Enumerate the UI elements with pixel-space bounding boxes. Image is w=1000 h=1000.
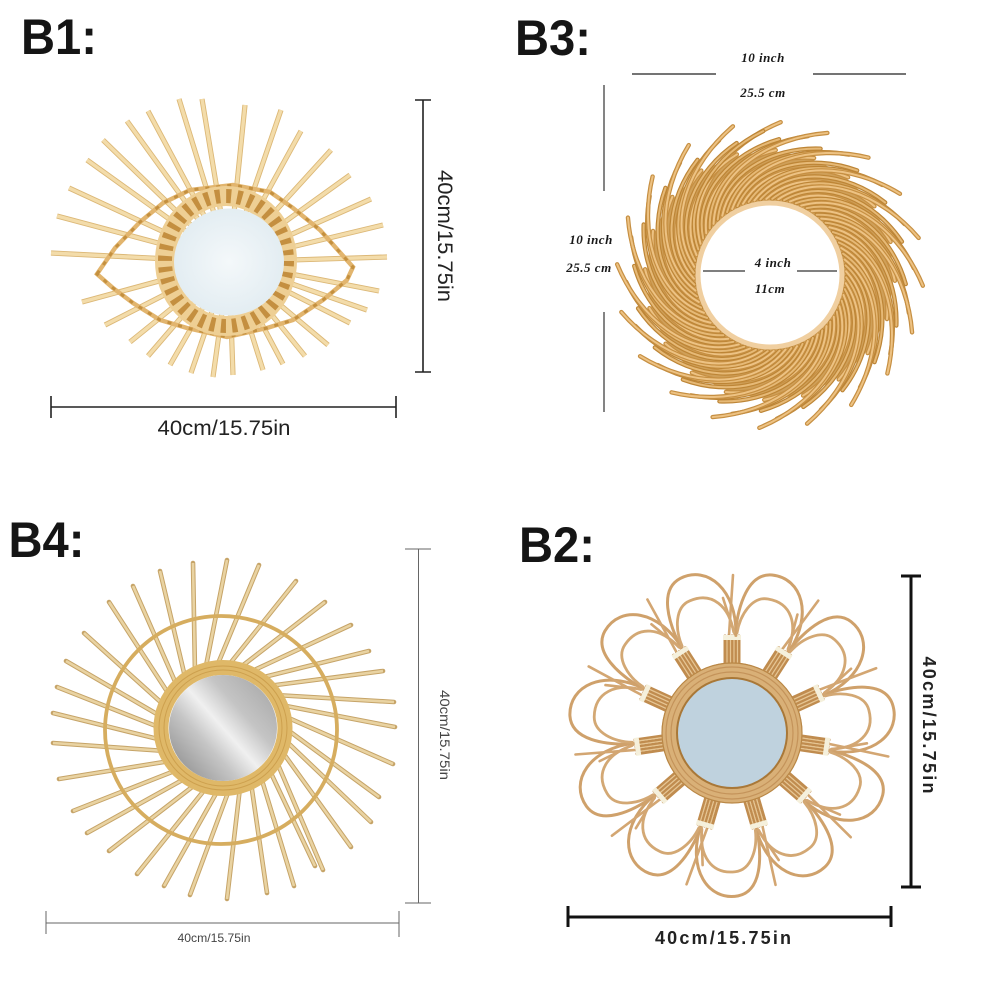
dimension: height: 40cm/15.75in [437, 690, 453, 780]
dimension: mirror diameter [703, 255, 837, 296]
heading: B3: B3: [515, 10, 591, 66]
icon: eye rattan mirror [51, 99, 387, 377]
heading: B2: B2: [519, 517, 595, 573]
dimension: mirror diameter: 4 inch [754, 255, 791, 270]
dimension: overall height [565, 85, 613, 412]
dimension: height: 40cm/15.75in [433, 170, 456, 302]
dimension: overall width [632, 50, 906, 100]
dimension: height [415, 100, 456, 372]
dimension: overall width: 10 inch [741, 50, 785, 65]
dimension: width [568, 906, 891, 948]
dimension: width: 40cm/15.75in [178, 931, 250, 945]
dimension: width [46, 911, 399, 945]
heading: B4: B4: [8, 512, 84, 568]
dimension: height [901, 576, 939, 887]
dimension: height [405, 549, 453, 903]
dimension: overall width: 25.5 cm [739, 85, 786, 100]
dimension: overall height: 25.5 cm [565, 260, 612, 275]
panel: B4 sunburst mirror [8, 512, 453, 945]
dimension: width [51, 396, 396, 440]
icon: flower rattan mirror [566, 562, 905, 904]
dimension: height: 40cm/15.75in [919, 656, 939, 794]
heading: B1: B1: [21, 9, 97, 65]
dimension: mirror diameter: 11cm [755, 281, 785, 296]
panel: B2 flower mirror [519, 517, 939, 948]
panel: B3 swirl mirror [515, 10, 945, 450]
dimension: width: 40cm/15.75in [158, 417, 290, 440]
dimension: overall height: 10 inch [569, 232, 613, 247]
panel: B1 eye mirror [21, 9, 456, 440]
dimension: width: 40cm/15.75in [655, 928, 791, 948]
icon: sunburst rattan mirror [53, 560, 395, 899]
icon: gold swirl mirror [595, 100, 945, 450]
